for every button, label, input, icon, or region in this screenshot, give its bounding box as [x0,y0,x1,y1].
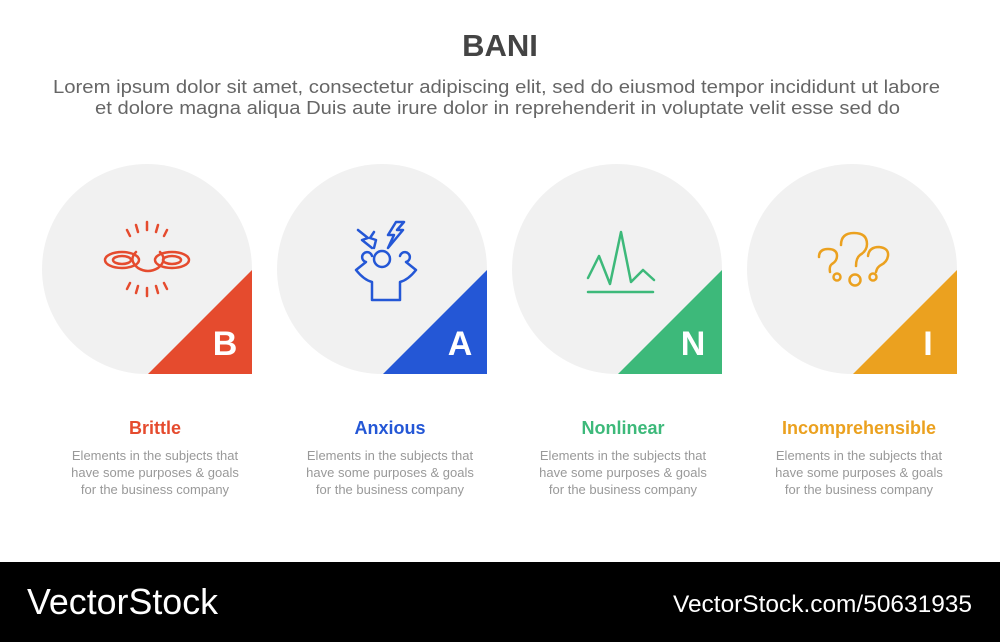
subtitle: et dolore magna aliqua Duis aute irure dolor in reprehenderit in voluptate velit esse sed do [95,98,900,118]
panel: anxious [277,164,487,497]
icon: broken chain [105,222,189,296]
panel: brittle: B [213,325,237,363]
panel: anxious: Anxious [354,418,426,438]
panel: incomprehensible: Elements in the subjects that [776,448,942,463]
text: brittle desc: Elements in the subjects that [72,448,238,463]
icon: question marks [819,233,888,286]
icon: stressed person [356,222,416,300]
panel: anxious: have some purposes & goals [306,465,474,480]
panel: nonlinear: Elements in the subjects that [540,448,706,463]
footer [0,562,1000,642]
panel: incomprehensible: I [923,325,933,363]
panel: brittle [42,164,252,497]
panel: nonlinear [512,164,722,497]
footer: VectorStock.com/50631935 [673,591,972,618]
panel: nonlinear: Nonlinear [581,418,665,438]
footer: VectorStock [27,581,219,622]
panel: incomprehensible: Incomprehensible [782,418,936,438]
panel: anxious: Elements in the subjects that [307,448,473,463]
text: brittle desc: have some purposes & goals [71,465,239,480]
title: BANI [462,28,538,63]
icon: spike chart [588,232,654,292]
panel: incomprehensible: have some purposes & goals [775,465,943,480]
text: brittle desc: for the business company [81,482,230,497]
panel: anxious: for the business company [316,482,465,497]
label: brittle: Brittle [129,418,181,438]
panel: incomprehensible: for the business company [785,482,934,497]
subtitle [53,77,940,118]
subtitle: Lorem ipsum dolor sit amet, consectetur adipiscing elit, sed do eiusmod tempor incididunt ut labore [53,77,940,97]
panel: nonlinear: N [681,325,705,363]
panel: nonlinear: have some purposes & goals [539,465,707,480]
panel: anxious: A [448,325,472,363]
text: brittle desc [71,448,239,497]
panel: incomprehensible [747,164,957,497]
panel: nonlinear: for the business company [549,482,698,497]
